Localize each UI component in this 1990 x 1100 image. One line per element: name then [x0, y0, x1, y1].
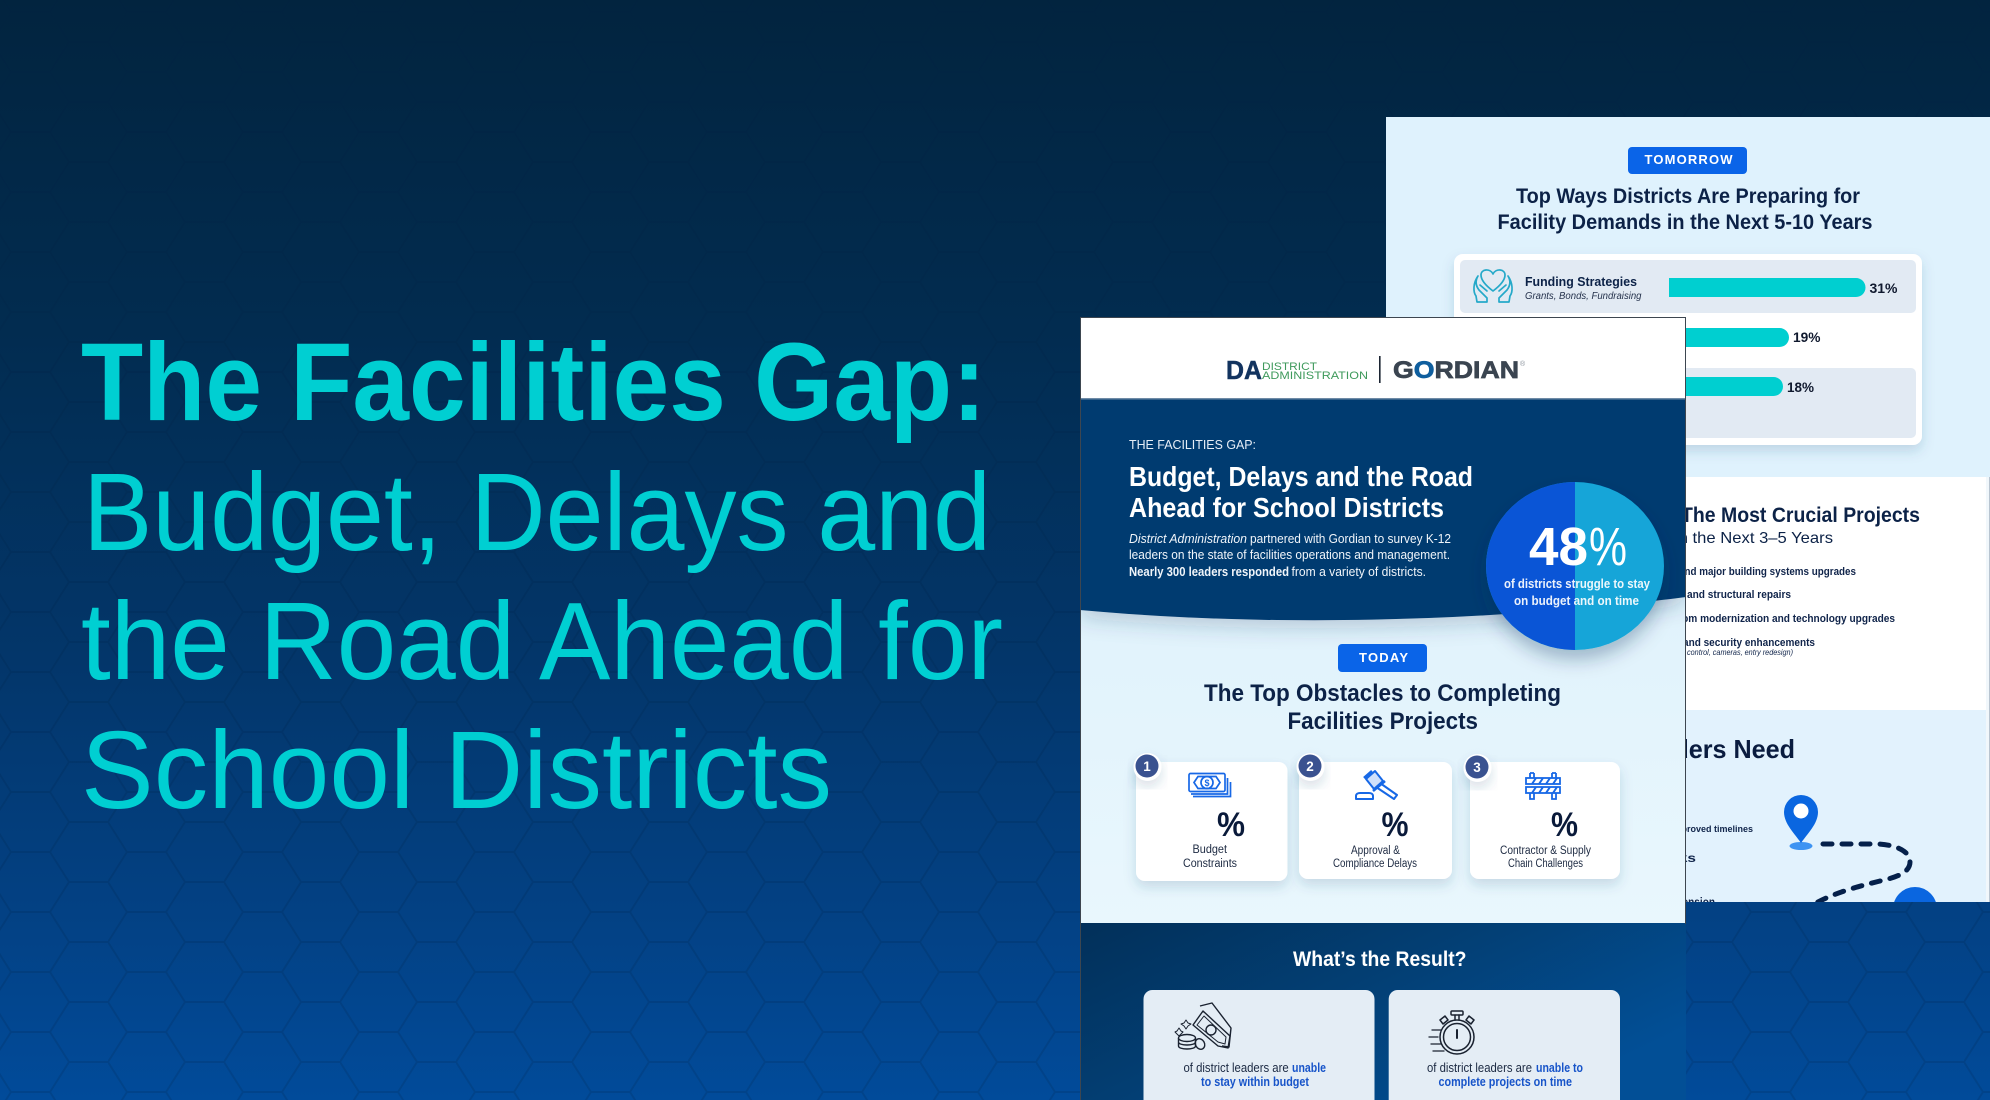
bar chart: preparation strategies: Grants, Bonds, Fundraising	[1525, 291, 1642, 302]
chart: 48% pie: 48	[1529, 517, 1588, 577]
title: The Facilities Gap:	[81, 321, 986, 444]
leaders need list: improved timelines	[1671, 824, 1753, 835]
icon: gavel	[1356, 771, 1397, 799]
card: unable to complete projects on time: unable to	[1536, 1061, 1583, 1075]
panel: dark results section	[1080, 923, 1686, 1100]
card: unable to complete projects on time	[1389, 990, 1620, 1100]
icon: money	[1189, 774, 1230, 796]
bar chart: preparation strategies: 18%	[1787, 379, 1815, 395]
hero heading: Budget, Delays and the Road	[1129, 461, 1473, 492]
card: unable to stay within budget: of district leaders are	[1184, 1061, 1289, 1075]
icon: location pin	[1784, 795, 1818, 850]
logo: district administration: DA	[1226, 355, 1262, 385]
card: unable to stay within budget: to stay within budget	[1201, 1075, 1310, 1089]
results heading: What’s the Result?	[1293, 948, 1466, 971]
chart: 48% pie: %	[1589, 517, 1627, 577]
bar chart: preparation strategies	[1454, 254, 1922, 445]
tomorrow heading: Facility Demands in the Next 5-10 Years	[1498, 210, 1873, 234]
hero intro text	[1129, 532, 1451, 579]
card: contractor and supply chain challenges: %	[1551, 806, 1578, 844]
logo: gordian: GORDIAN	[1393, 357, 1519, 384]
crucial projects list: room modernization and technology upgrades	[1672, 613, 1895, 625]
icon: money: $	[1204, 778, 1210, 788]
arrow: dashed road path	[1811, 844, 1910, 906]
card: budget constraints: %	[1217, 806, 1245, 844]
icon: road barrier	[1526, 773, 1560, 799]
title	[81, 321, 1003, 832]
logo: district administration	[1227, 360, 1367, 380]
chart: 48% pie	[1486, 482, 1664, 650]
panel: dark hero with curved edge	[1080, 399, 1686, 620]
icon: stopwatch	[1429, 1011, 1474, 1054]
hero heading: Ahead for School Districts	[1129, 492, 1444, 523]
title: School Districts	[81, 709, 832, 832]
leaders need list: extension	[1668, 895, 1715, 909]
chart: 48% pie: on budget and on time	[1514, 594, 1639, 608]
logo: district administration: DISTRICT	[1262, 361, 1317, 373]
number badge 2: 2	[1306, 759, 1314, 774]
crucial projects list	[1686, 567, 1895, 656]
number badge 1: 1	[1143, 759, 1151, 774]
crucial projects list: and major building systems upgrades	[1679, 566, 1856, 578]
today heading: Facilities Projects	[1288, 708, 1478, 735]
crucial projects heading	[1686, 506, 1920, 543]
logo: gordian: ®	[1520, 360, 1526, 368]
icon: destination circle	[1894, 887, 1936, 902]
panel: pale body	[1080, 590, 1686, 924]
number badge 3	[1464, 754, 1492, 782]
card: approval and compliance delays: %	[1382, 806, 1408, 844]
leaders need heading: Leaders Need	[1630, 734, 1795, 764]
panel: front infographic page (today)	[1080, 317, 1686, 1100]
card: contractor and supply chain challenges: Contractor & Supply	[1500, 845, 1591, 857]
tomorrow heading: Top Ways Districts Are Preparing for	[1516, 184, 1861, 208]
card: unable to complete projects on time: of district leaders are	[1427, 1061, 1532, 1075]
title: Budget, Delays and	[83, 451, 991, 574]
card: budget constraints: Budget	[1192, 844, 1228, 856]
card: approval and compliance delays	[1299, 762, 1452, 879]
card: unable to stay within budget	[1144, 990, 1374, 1100]
panel: white logo header	[1080, 317, 1686, 400]
tomorrow badge: TOMORROW	[1644, 152, 1733, 167]
number badge 2	[1296, 753, 1324, 781]
leaders need list: risks	[1660, 851, 1696, 865]
hero intro text: leaders on the state of facilities operations and management.	[1129, 548, 1450, 562]
tomorrow badge	[1628, 147, 1747, 174]
hero intro text: from a variety of districts.	[1292, 565, 1426, 579]
hero intro text: Nearly 300 leaders responded	[1129, 565, 1289, 579]
hero intro text: partnered with Gordian to survey K-12	[1250, 532, 1451, 546]
today heading: The Top Obstacles to Completing	[1204, 680, 1561, 707]
tomorrow heading	[1498, 184, 1873, 234]
hero eyebrow: THE FACILITIES GAP:	[1129, 437, 1256, 452]
card: contractor and supply chain challenges	[1470, 762, 1620, 879]
chart: 48% pie: of districts struggle to stay	[1504, 577, 1650, 591]
card: budget constraints: Constraints	[1183, 858, 1237, 870]
today badge	[1338, 644, 1427, 672]
card: approval and compliance delays: Approval &	[1351, 845, 1400, 857]
crucial projects list: and structural repairs	[1687, 589, 1791, 601]
today badge: TODAY	[1359, 650, 1408, 665]
card: unable to complete projects on time: complete projects on time	[1438, 1075, 1572, 1089]
leaders need list	[1686, 826, 1753, 902]
crucial projects list: and security enhancements	[1683, 637, 1815, 649]
crucial projects heading: The Most Crucial Projects	[1681, 503, 1920, 527]
number badge 1	[1134, 753, 1162, 781]
title: the Road Ahead for	[81, 580, 1003, 703]
crucial projects heading: in the Next 3–5 Years	[1675, 530, 1833, 547]
hero heading	[1130, 466, 1472, 518]
hero intro text: District Administration	[1129, 532, 1247, 546]
card: contractor and supply chain challenges: Chain Challenges	[1508, 858, 1583, 870]
card: budget constraints	[1136, 762, 1288, 881]
crucial projects list: (access control, cameras, entry redesign)	[1660, 647, 1793, 657]
bar chart: preparation strategies: Funding Strategies	[1525, 274, 1637, 289]
icon: cash and coins	[1175, 1003, 1231, 1051]
logo: district administration: ADMINISTRATION	[1262, 370, 1368, 382]
number badge 3: 3	[1473, 760, 1481, 775]
icon: hands holding heart	[1474, 270, 1512, 302]
bar chart: preparation strategies: 31%	[1870, 280, 1898, 296]
bar chart: preparation strategies: 19%	[1793, 329, 1821, 345]
logo: gordian	[1394, 360, 1525, 378]
today heading	[1204, 680, 1561, 735]
panel: back infographic page (tomorrow)	[1386, 117, 1990, 931]
front page outline	[1080, 318, 1686, 1100]
card: unable to stay within budget: unable	[1292, 1061, 1326, 1075]
card: approval and compliance delays: Compliance Delays	[1333, 858, 1417, 870]
